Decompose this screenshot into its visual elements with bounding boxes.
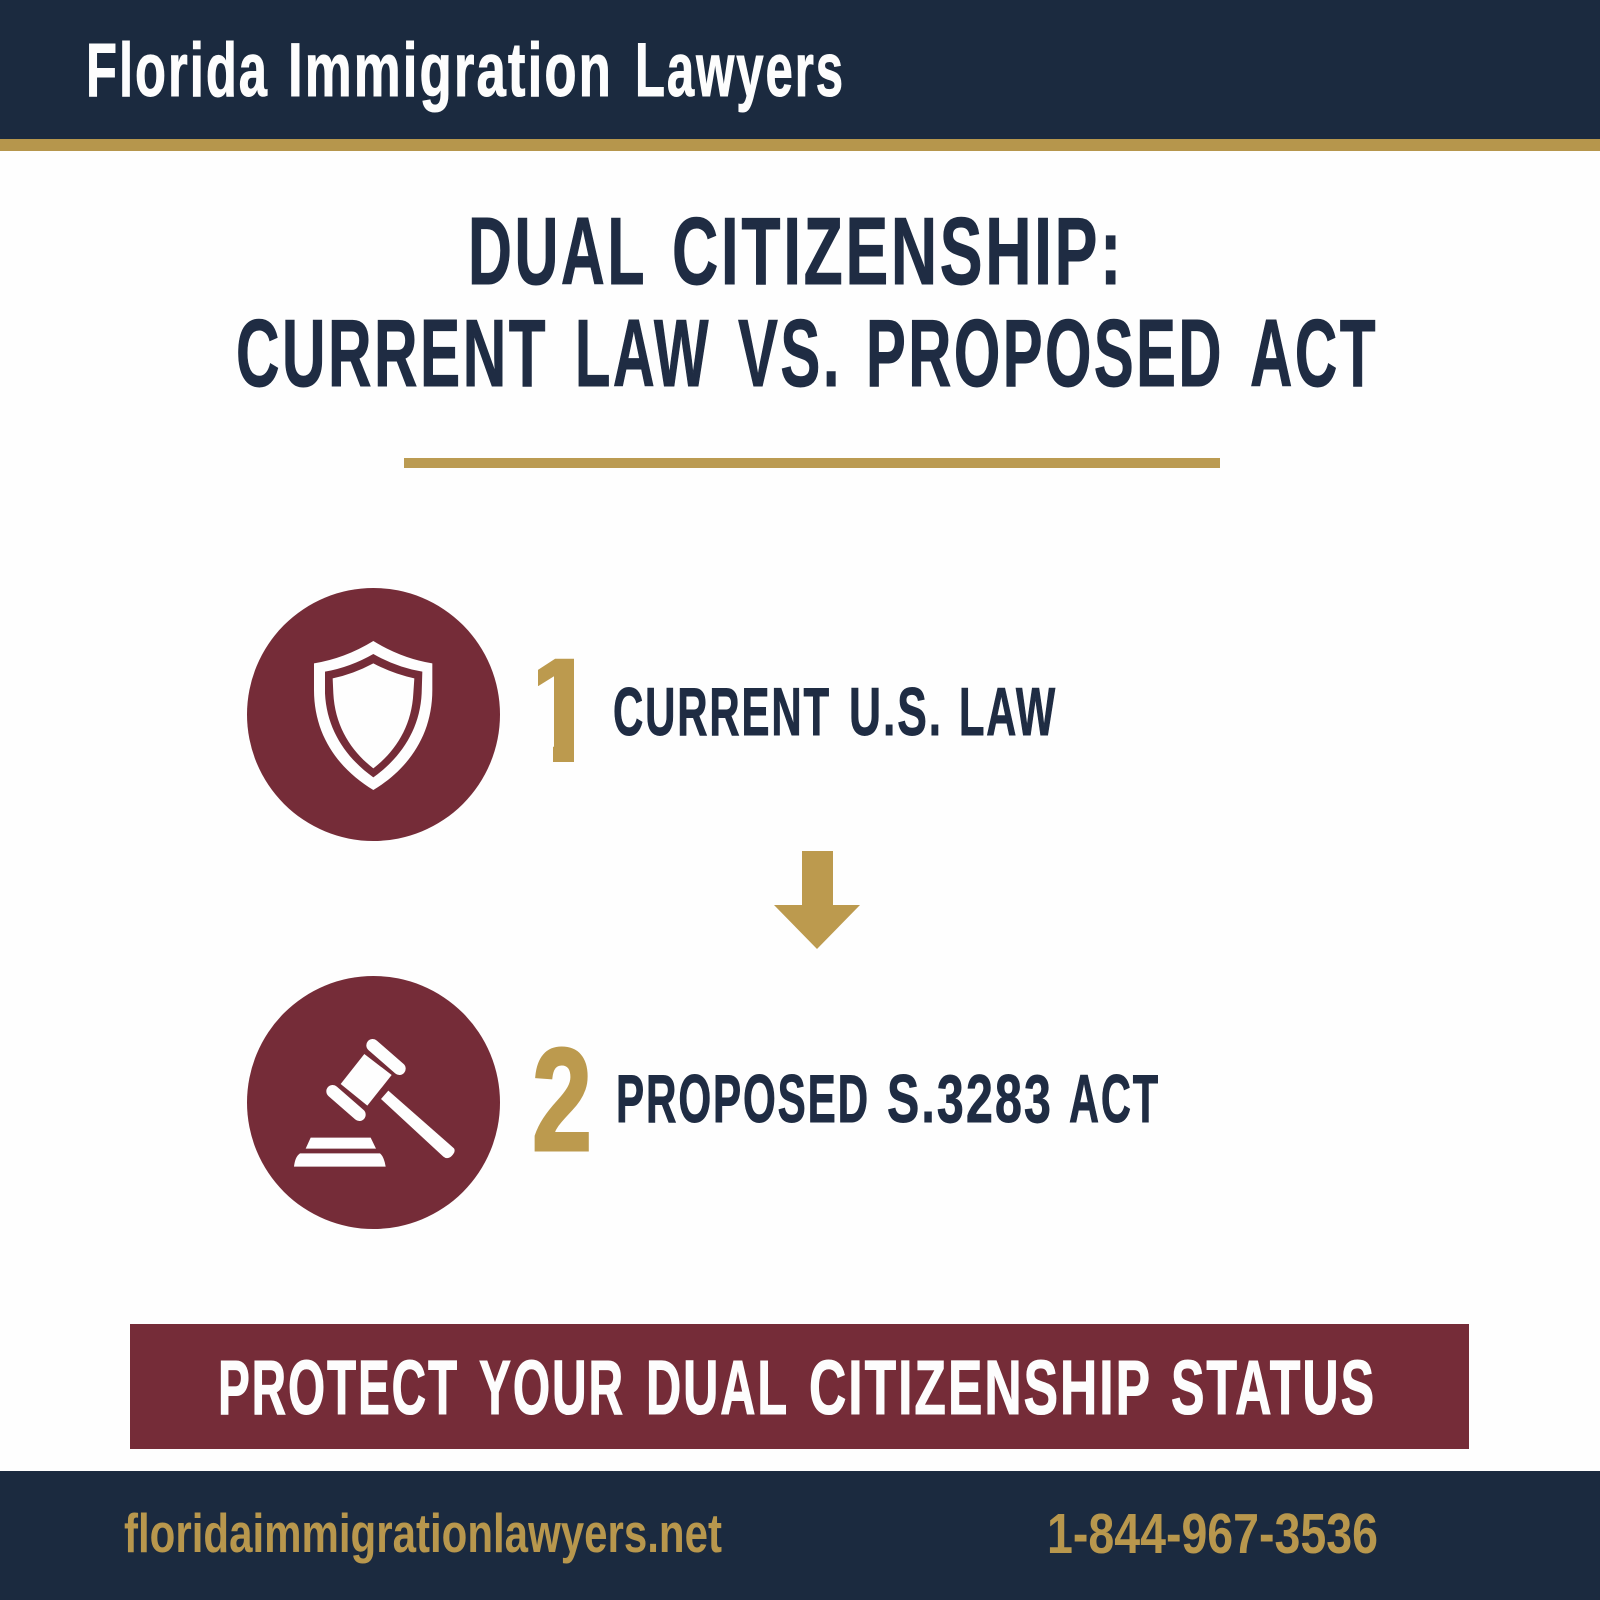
number 1: 1 (519, 626, 602, 794)
call to action banner: YOUR (479, 1345, 625, 1431)
header firm name: Lawyers (635, 28, 845, 113)
label: proposed S.3283 act: PROPOSED (616, 1061, 870, 1137)
title (236, 198, 1378, 407)
call to action banner: PROTECT (218, 1345, 459, 1431)
header firm name: Florida (86, 28, 269, 113)
label: proposed S.3283 act: ACT (1069, 1061, 1160, 1137)
label: current U.S. law: LAW (959, 674, 1057, 750)
icon: gavel (247, 976, 500, 1229)
label: current U.S. law: CURRENT (613, 674, 831, 750)
header firm name: Immigration (288, 28, 613, 113)
title divider (404, 458, 1220, 468)
call to action banner: STATUS (1171, 1345, 1376, 1431)
call to action banner: DUAL (646, 1345, 789, 1431)
step 2: proposed act (247, 976, 1160, 1229)
website: floridaimmigrationlawyers.net (124, 1502, 722, 1564)
header band (0, 0, 1600, 151)
title: PROPOSED (866, 300, 1224, 407)
label: proposed S.3283 act: S.3283 (887, 1061, 1053, 1137)
icon: shield (247, 588, 500, 841)
number 2: 2 (532, 1018, 592, 1181)
call to action banner (130, 1324, 1469, 1449)
title: LAW (575, 300, 711, 407)
header firm name (86, 28, 845, 113)
title: CITIZENSHIP: (672, 198, 1124, 305)
title: DUAL (468, 198, 647, 305)
arrow: down (774, 851, 860, 949)
label: current U.S. law: U.S. (849, 674, 943, 750)
call to action banner: CITIZENSHIP (809, 1345, 1152, 1431)
step 1: current U.S. law (247, 588, 1057, 841)
phone number: 1-844-967-3536 (1047, 1502, 1378, 1566)
footer band (0, 1471, 1600, 1600)
title: CURRENT (236, 300, 548, 407)
title: ACT (1250, 300, 1378, 407)
title: VS. (738, 300, 842, 407)
